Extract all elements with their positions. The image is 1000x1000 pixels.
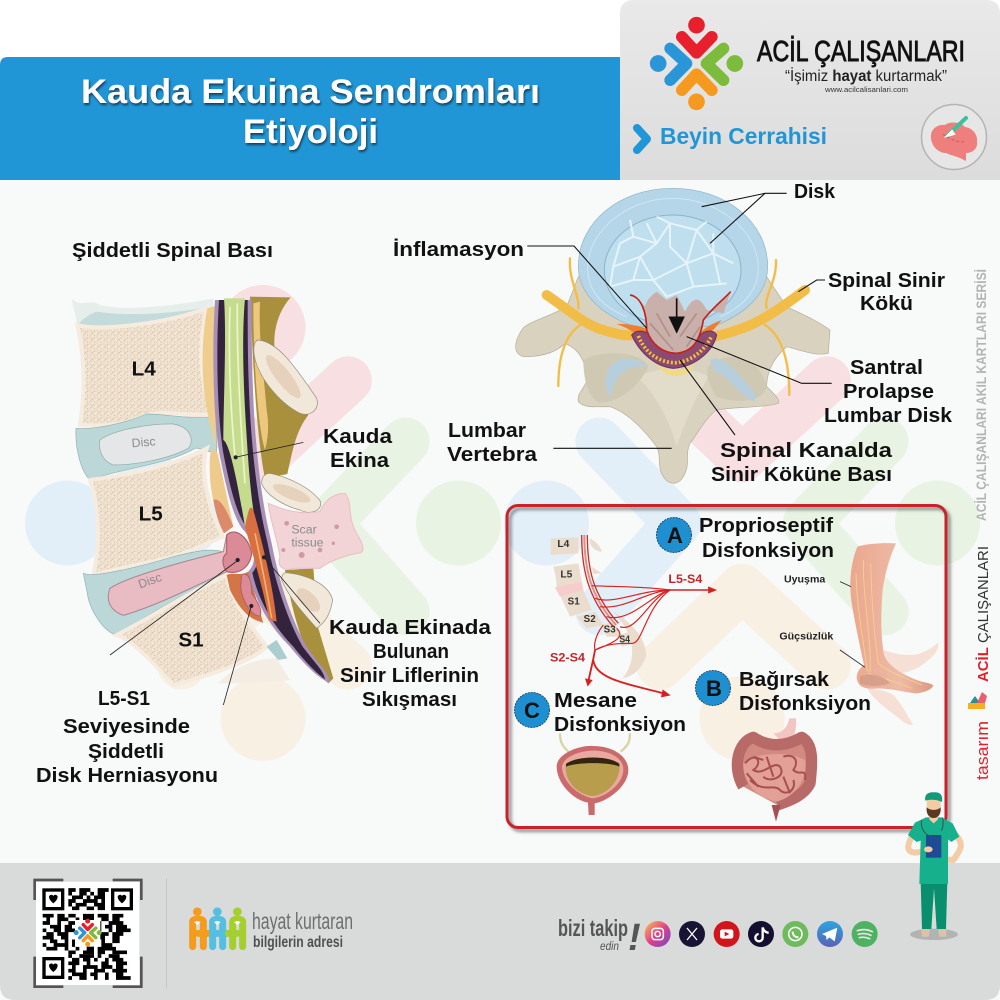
- herniated disc zone: [630, 292, 731, 353]
- label: severe disc herniation at L5-S1: Şiddetli: [88, 741, 164, 763]
- labels on spine: [132, 357, 204, 652]
- label: compression of cauda equina fibres: Sıkışması: [362, 689, 457, 711]
- bone shading: [637, 369, 708, 447]
- leader lines: [110, 442, 320, 705]
- label: nerve root compression in canal: [711, 440, 893, 486]
- badge C: [514, 692, 550, 728]
- icon: brain with scalpel: [922, 104, 986, 170]
- arms: [908, 837, 961, 860]
- icon: instagram: [645, 921, 671, 947]
- sagittal lumbar spine illustration: Scar: [291, 522, 317, 536]
- side text: series name: ACİL ÇALIŞANLARI AKIL KARTLARI SERİSİ: [974, 269, 989, 521]
- label: cauda equina: Kauda: [323, 426, 393, 448]
- brand logo: [650, 17, 743, 110]
- slogan text: bilgilerin adresi: [253, 934, 343, 951]
- label: severe disc herniation at L5-S1: Seviyesinde: [63, 716, 190, 738]
- heading B: [739, 669, 871, 715]
- scar tissue: [268, 493, 363, 569]
- stethoscope: [921, 817, 943, 836]
- label: lumbar vertebra: Vertebra: [447, 444, 538, 466]
- hand: [924, 846, 933, 852]
- category name: Beyin Cerrahisi: [660, 123, 827, 149]
- label: compression of cauda equina fibres: Kauda Ekinada: [329, 617, 492, 639]
- label: compression of cauda equina fibres: Sinir Liflerinin: [340, 665, 479, 687]
- label: severe disc herniation at L5-S1: L5-S1: [98, 688, 150, 710]
- disc nucleus L4-L5: [99, 424, 191, 465]
- label: lumbar vertebra: [447, 420, 538, 466]
- leader lines: [527, 193, 832, 448]
- extruded fragment: [241, 574, 261, 616]
- vertebra L5: [90, 448, 223, 575]
- icon: x: [679, 921, 705, 947]
- title: Etiyoloji: [243, 113, 378, 151]
- label: severe disc herniation at L5-S1: Disk Herniasyonu: [36, 765, 218, 787]
- mini spine bones: [551, 537, 646, 678]
- facet joints: [606, 359, 647, 398]
- panel: dysfunction types: [507, 506, 946, 828]
- ghost lower foot: [867, 687, 913, 725]
- label: inflammation: İnflamasyon: [393, 238, 524, 261]
- label: spinal nerve root: [828, 270, 945, 315]
- label: compression of cauda equina fibres: Bulunan: [373, 641, 449, 663]
- vertebra S1: [117, 575, 267, 685]
- panel illustrations: S2-S4: [550, 650, 585, 664]
- panel small labels: [557, 539, 630, 645]
- label: disc: Disk: [794, 181, 836, 203]
- side text: design credit: [968, 546, 992, 780]
- badge B: B: [706, 676, 722, 701]
- label: central prolapse lumbar disc: [824, 357, 953, 427]
- posterior fat: [253, 302, 268, 450]
- badge A: [656, 518, 692, 552]
- panel illustrations: L5-S4: [668, 572, 703, 586]
- sagittal lumbar spine illustration: Disc: [136, 570, 164, 591]
- label: compression of cauda equina fibres: [329, 617, 492, 711]
- downward arrow: [669, 298, 685, 333]
- footer band: [0, 863, 1000, 1000]
- tagline: “İşimiz hayat kurtarmak”: [785, 67, 947, 85]
- title: [81, 73, 540, 151]
- badge B: [696, 670, 730, 706]
- labels on spine: S1: [178, 629, 204, 652]
- disc annulus L4-L5: [76, 414, 217, 480]
- badge C: C: [524, 698, 540, 723]
- panel illustrations: Uyuşma: [784, 574, 826, 585]
- follow us text: edin: [600, 939, 619, 953]
- heading C: Disfonksiyon: [554, 714, 686, 736]
- heading A: Disfonksiyon: [702, 540, 834, 562]
- QR code: [35, 878, 167, 988]
- spinal canal crescent: [632, 331, 717, 368]
- vertebra bone: [516, 277, 830, 483]
- vertebra L4: [77, 308, 213, 426]
- label: nerve root compression in canal: Sinir Köküne Bası: [711, 464, 892, 486]
- spinous processes: [254, 340, 333, 628]
- panel illustrations: Güçsüzlük: [779, 631, 834, 642]
- herniated disc nucleus: [108, 532, 252, 615]
- follow us text: !: [628, 917, 641, 959]
- disc nucleus: [604, 215, 741, 325]
- label: spinal nerve root: Spinal Sinir: [828, 270, 945, 292]
- label: cauda equina: Ekina: [330, 450, 390, 472]
- label: severe disc herniation at L5-S1: [36, 688, 218, 787]
- sagittal lumbar spine illustration: Disc: [131, 434, 156, 450]
- yellow nerve roots: [547, 258, 805, 395]
- icon: spotify: [852, 921, 878, 947]
- heading A: Proprioseptif: [699, 515, 833, 537]
- label: nerve root compression in canal: Spinal Kanalda: [720, 440, 893, 462]
- label: central prolapse lumbar disc: Prolapse: [843, 381, 934, 403]
- ankle shade: [860, 674, 890, 686]
- fat left of canal: [203, 305, 218, 447]
- side text: design credit: tasarım: [973, 721, 992, 780]
- leg nerves: [856, 560, 922, 688]
- intestines: [737, 718, 812, 822]
- panel illustrations: [550, 535, 834, 822]
- badge A: A: [667, 523, 683, 548]
- watermark logos: [25, 285, 980, 761]
- label: lumbar vertebra: Lumbar: [448, 420, 526, 442]
- heading B: Disfonksiyon: [739, 693, 871, 715]
- upper ligament fade: [72, 298, 213, 325]
- panel small labels: S1: [568, 597, 580, 608]
- slogan text: [252, 908, 353, 951]
- axial vertebra illustration: [516, 188, 832, 483]
- panel small labels: S4: [619, 634, 630, 645]
- panel small labels: L4: [557, 539, 570, 550]
- sacral lower fragment: [218, 658, 290, 683]
- trousers: [921, 882, 947, 929]
- illustration: leg and foot: [840, 543, 938, 725]
- heading B: Bağırsak: [739, 669, 830, 691]
- side text: design credit: ACİL ÇALIŞANLARI: [975, 546, 992, 682]
- clipboard: [926, 835, 941, 858]
- surgeon character: [908, 792, 961, 940]
- S2-S4 arrows: [589, 650, 663, 693]
- category chevron: [637, 128, 647, 150]
- brand panel: [620, 0, 1000, 180]
- label: central prolapse lumbar disc: Santral: [850, 357, 923, 379]
- footer divider: [166, 878, 167, 988]
- panel small labels: S2: [584, 614, 596, 625]
- leg callout arrows: [840, 582, 865, 667]
- posterior ligament: [250, 297, 308, 478]
- L5-S4 arrow: [667, 587, 717, 593]
- neck and head: [929, 813, 938, 823]
- orange inflamed edge: [617, 324, 655, 337]
- thecal sac inner: [217, 300, 325, 679]
- icon: whatsapp: [782, 921, 808, 947]
- follow us text: bizi takip: [558, 915, 628, 941]
- cap: [925, 792, 942, 802]
- slogan logo: people: [193, 907, 243, 947]
- lower ligament: [285, 568, 333, 683]
- heading C: [554, 690, 686, 736]
- social media icons: [645, 921, 878, 947]
- follow us text: [558, 915, 641, 959]
- disc annulus: [578, 188, 768, 327]
- green nerve roots: [223, 298, 253, 527]
- nerve roots: [582, 535, 618, 627]
- website: www.acilcalisanlari.com: [824, 85, 908, 94]
- sagittal lumbar spine illustration: tissue: [291, 536, 324, 550]
- leg shape: [850, 543, 933, 693]
- labels on spine: L5: [139, 503, 163, 526]
- icon: telegram: [817, 921, 843, 947]
- ghost upper foot: [883, 643, 938, 674]
- panel small labels: L5: [560, 569, 573, 580]
- panel small labels: S3: [604, 624, 616, 635]
- icon: tiktok: [748, 921, 774, 947]
- labels on spine: L4: [132, 357, 156, 380]
- label: central prolapse lumbar disc: Lumbar Disk: [824, 405, 953, 427]
- title: Kauda Ekuina Sendromları: [81, 73, 540, 111]
- disc annulus L5-S1: [83, 550, 227, 635]
- slogan text: hayat kurtaran: [252, 908, 353, 934]
- title banner: [0, 57, 620, 180]
- scrub top: [908, 817, 959, 884]
- heading A: [699, 515, 834, 562]
- label: cauda equina: [323, 426, 393, 472]
- sagittal lumbar spine illustration: [72, 297, 363, 705]
- heading C: Mesane: [554, 690, 637, 712]
- bladder: [557, 733, 630, 815]
- shoes: [921, 929, 946, 937]
- compressed orange nerve roots: [245, 507, 277, 622]
- floor shadow: [910, 929, 958, 940]
- hernia red edge: [630, 292, 731, 353]
- thecal sac outer: [213, 300, 329, 683]
- icon: youtube: [714, 921, 740, 947]
- label: spinal nerve root: Kökü: [860, 293, 913, 315]
- heading: severe spinal compression: Şiddetli Spinal Bası: [72, 240, 273, 262]
